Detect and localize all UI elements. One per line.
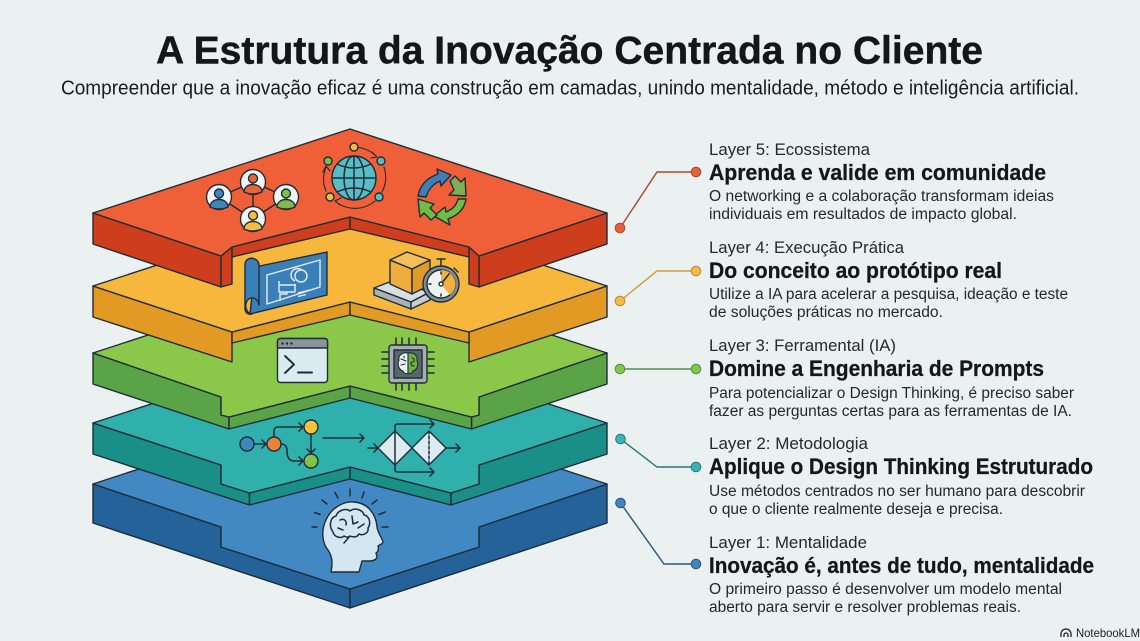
text block: layer 3 xyxy=(709,337,1074,420)
layered stack diagram xyxy=(93,129,607,608)
text block: layer 5: individuais em resultados de impacto global. xyxy=(709,206,1017,223)
layer 3: green slab xyxy=(93,269,607,429)
text block: layer 1: Inovação é, antes de tudo, mentalidade xyxy=(709,553,1094,578)
text block: layer 2: Aplique o Design Thinking Estruturado xyxy=(709,454,1093,479)
connector: layer 2 xyxy=(616,434,701,472)
text block: layer 3: Para potencializar o Design Thinking, é preciso saber xyxy=(709,385,1074,402)
text block: layer 4 xyxy=(709,239,1068,321)
subtitle: Compreender que a inovação eficaz é uma construção em camadas, unindo mentalidade, método e inteligência artificial. xyxy=(61,76,1079,100)
title: A Estrutura da Inovação Centrada no Cliente xyxy=(156,30,983,72)
layer 5: red slab xyxy=(93,129,607,287)
icon: AI chip with brain xyxy=(382,338,434,390)
icon: process flow and diamonds xyxy=(240,420,460,476)
text block: layer 4: Utilize a IA para acelerar a pesquisa, ideação e teste xyxy=(709,286,1068,303)
connector: layer 3 xyxy=(615,364,701,374)
icon: head with brain xyxy=(312,489,388,572)
icon: cycle arrows xyxy=(418,169,466,225)
icon: people network xyxy=(206,170,298,232)
connector: layer 5 xyxy=(615,167,701,233)
connector: layer 4 xyxy=(615,266,701,306)
layer 1: blue slab xyxy=(93,400,607,608)
text block: layer 5 xyxy=(709,141,1054,223)
text block: layer 2: o que o cliente realmente deseja e precisa. xyxy=(709,501,1003,518)
text block: layer 2 xyxy=(709,435,1093,518)
text block: layer 1: O primeiro passo é desenvolver um modelo mental xyxy=(709,581,1062,598)
text block: layer 4: Do conceito ao protótipo real xyxy=(709,258,1002,283)
text block: layer 4: de soluções práticas no mercado. xyxy=(709,304,943,321)
text block: layer 2: Use métodos centrados no ser humano para descobrir xyxy=(709,483,1085,500)
icon: globe with orbit xyxy=(323,143,386,208)
text block: layer 5: O networking e a colaboração transformam ideias xyxy=(709,188,1054,205)
text block: layer 3: Layer 3: Ferramental (IA) xyxy=(709,337,896,355)
connector: layer 1 xyxy=(616,498,701,569)
text block: layer 1: Layer 1: Mentalidade xyxy=(709,534,867,552)
layer 2: teal slab xyxy=(93,339,607,505)
icon: blueprint xyxy=(245,252,327,314)
icon: terminal window xyxy=(278,338,328,382)
text block: layer 5: Aprenda e valide em comunidade xyxy=(709,160,1046,185)
layer 4: yellow slab xyxy=(93,202,607,362)
icon: box on platform with stopwatch xyxy=(374,252,459,309)
text block: layer 3: Domine a Engenharia de Prompts xyxy=(709,356,1044,381)
text block: layer 1: aberto para servir e resolver problemas reais. xyxy=(709,599,1021,616)
text block: layer 1 xyxy=(709,534,1094,616)
text block: layer 5: Layer 5: Ecossistema xyxy=(709,141,871,159)
text block: layer 4: Layer 4: Execução Prática xyxy=(709,239,905,257)
text block: layer 3: fazer as perguntas certas para as ferramentas de IA. xyxy=(709,403,1072,420)
text block: layer 2: Layer 2: Metodologia xyxy=(709,435,869,453)
